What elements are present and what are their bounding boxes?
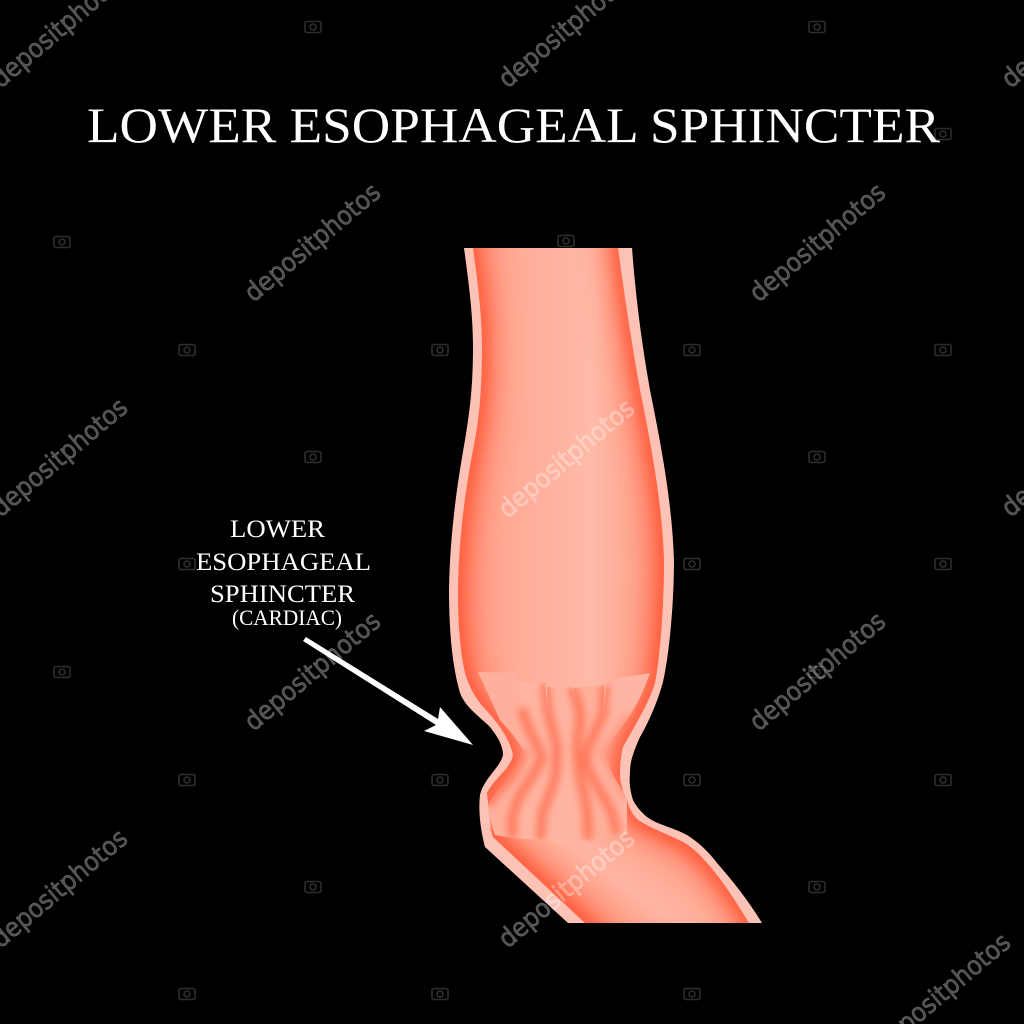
callout label <box>196 516 371 630</box>
callout label: SPHINCTER <box>210 581 355 608</box>
fold 1 <box>478 672 542 838</box>
watermarks: depositphotos <box>239 177 387 308</box>
fold 2 <box>512 681 557 840</box>
folds of the sphincter <box>478 672 650 845</box>
lumen edge shading <box>458 248 749 923</box>
callout label: (CARDIAC) <box>232 605 342 630</box>
watermarks: depositphotos <box>239 606 387 737</box>
fold 3 <box>540 687 588 845</box>
fold crease shading <box>488 683 630 840</box>
esophagus outer wall <box>449 248 762 923</box>
callout label: LOWER <box>230 516 325 543</box>
watermarks: depositphotos <box>493 393 641 524</box>
arrow <box>303 637 473 745</box>
title: LOWER ESOPHAGEAL SPHINCTER <box>87 97 941 153</box>
fold 5 <box>587 673 650 835</box>
watermarks: depositphotos <box>744 177 892 308</box>
esophagus lumen <box>458 248 749 923</box>
stomach lower chamber <box>489 822 741 923</box>
esophagus illustration <box>449 225 763 947</box>
fold 4 <box>573 685 617 843</box>
watermarks: depositphotos <box>493 823 641 954</box>
watermarks: depositphotos <box>744 606 892 737</box>
callout label: ESOPHAGEAL <box>196 549 371 576</box>
